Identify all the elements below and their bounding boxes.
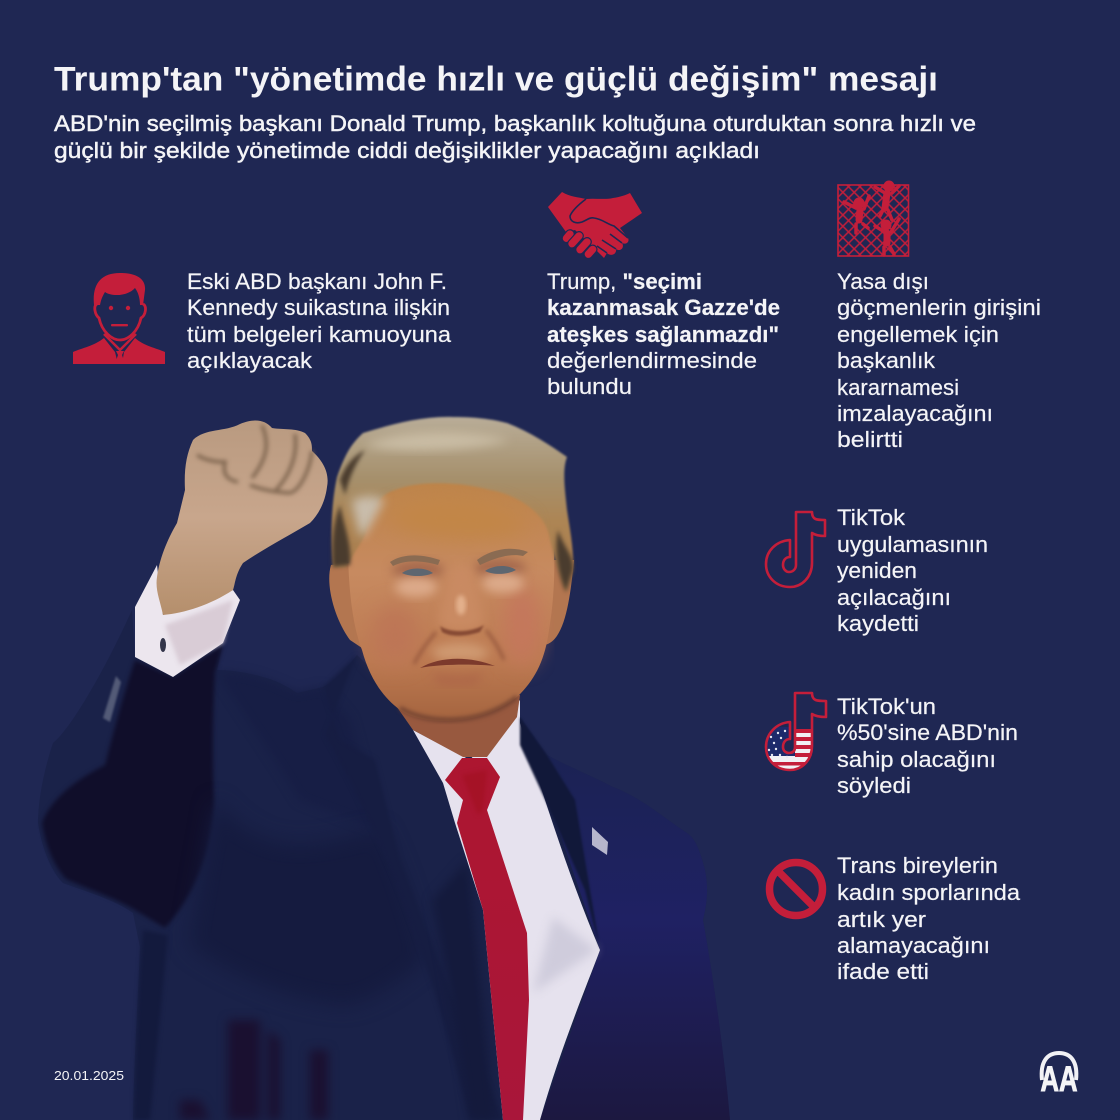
text: imzalayacağını <box>837 401 993 426</box>
upper lip <box>430 643 490 660</box>
left lapel <box>323 655 503 1120</box>
nose <box>438 565 484 631</box>
text: başkanlık <box>837 348 936 373</box>
text <box>837 505 988 636</box>
shirt <box>413 700 600 1120</box>
text: tüm belgeleri kamuoyuna <box>187 322 452 347</box>
text: engellemek için <box>837 322 999 347</box>
face <box>348 474 554 721</box>
icon: TikTok note with US flag <box>764 693 826 774</box>
text: ateşkes sağlanmazdı" <box>547 322 779 347</box>
text: yeniden <box>837 558 917 583</box>
text: kaydetti <box>837 611 919 636</box>
neck <box>385 690 520 757</box>
cuff shade <box>165 600 233 665</box>
suit right side shading <box>520 717 730 1120</box>
text: Eski ABD başkanı John F. <box>187 269 447 294</box>
text: Trans bireylerin <box>837 853 998 878</box>
hair dark sides <box>332 450 573 592</box>
nasolabial folds <box>414 630 504 664</box>
text: belirtti <box>837 427 903 452</box>
item: Gaza ceasefire <box>547 192 780 399</box>
text <box>547 269 780 399</box>
nose underside <box>440 625 484 636</box>
text: göçmenlerin girişini <box>837 295 1041 320</box>
text: bulundu <box>547 374 632 399</box>
jaw line shadow <box>400 697 517 720</box>
sleeve buttons <box>103 676 121 722</box>
title: Trump'tan "yönetimde hızlı ve güçlü değişim" mesajı <box>54 60 938 98</box>
item: TikTok reopen <box>766 505 988 636</box>
text: açılacağını <box>837 585 951 610</box>
hair light streak <box>352 496 385 538</box>
subtitle <box>54 111 976 163</box>
text: söyledi <box>837 773 911 798</box>
text: kararnamesi <box>837 375 959 400</box>
text: değerlendirmesinde <box>547 348 757 373</box>
text: kazanmasak Gazze'de <box>547 295 780 320</box>
eye bags <box>395 577 437 597</box>
text: ifade etti <box>837 959 929 984</box>
item: illegal immigration <box>837 180 1041 452</box>
text <box>837 853 1021 984</box>
right lapel <box>520 717 600 950</box>
text: uygulamasının <box>837 532 988 557</box>
text <box>837 269 1041 452</box>
icon: TikTok note outline <box>766 512 825 587</box>
text: Yasa dışı <box>837 269 929 294</box>
shirt shadow fold <box>533 917 597 993</box>
item: JFK documents <box>73 269 452 373</box>
cheek shading <box>371 605 419 665</box>
torso shadow crescent <box>190 800 425 1005</box>
shirt cuff <box>135 565 240 677</box>
text: açıklayacak <box>187 348 313 373</box>
text: kadın sporlarında <box>837 880 1021 905</box>
brows <box>390 549 528 566</box>
item: trans athletes <box>770 853 1021 984</box>
eyes <box>402 566 516 576</box>
item: TikTok 50 percent <box>764 693 1018 798</box>
icon: prohibition sign <box>770 862 822 916</box>
text: Kennedy suikastına ilişkin <box>187 295 450 320</box>
text: TikTok <box>837 505 906 530</box>
fist and forearm <box>157 421 328 615</box>
icon: man portrait <box>73 273 165 364</box>
text: TikTok'un <box>837 694 936 719</box>
mouth <box>420 659 495 668</box>
date: 20.01.2025 <box>54 1068 124 1083</box>
suit jacket <box>38 610 730 1120</box>
logo: Anadolu Agency <box>1040 1053 1078 1099</box>
ears <box>329 560 574 648</box>
nose highlight <box>456 595 466 615</box>
lower lip <box>430 672 485 685</box>
shoulder shading <box>217 672 380 830</box>
icon: handshake <box>548 192 642 260</box>
hair <box>332 417 573 592</box>
tie <box>445 758 529 1120</box>
text <box>187 269 452 373</box>
blurred foreground hands <box>180 1020 328 1120</box>
sleeve under-arm strip <box>134 930 168 1120</box>
forehead glow <box>385 499 530 539</box>
dark sleeve shadow <box>42 645 223 928</box>
logo: Anadolu Agency: AA <box>1040 1060 1078 1099</box>
text: artık yer <box>837 907 926 932</box>
text: sahip olacağını <box>837 747 996 772</box>
text <box>837 694 1018 798</box>
tie knot shading <box>462 770 487 815</box>
subtitle: güçlü bir şekilde yönetimde ciddi değişiklikler yapacağını açıkladı <box>54 138 760 163</box>
text: %50'sine ABD'nin <box>837 720 1018 745</box>
finger shadows <box>197 425 312 493</box>
text: alamayacağını <box>837 933 990 958</box>
photo: Donald Trump raising fist <box>38 417 730 1120</box>
text: Trump, "seçimi <box>547 269 702 294</box>
lapel dark band beside tie <box>432 860 495 1120</box>
flag pin <box>592 827 608 855</box>
eye sockets <box>392 560 444 580</box>
cuff link <box>160 638 166 652</box>
subtitle: ABD'nin seçilmiş başkanı Donald Trump, başkanlık koltuğuna oturduktan sonra hızlı ve <box>54 111 976 136</box>
icon: fence with climbers <box>838 180 908 256</box>
